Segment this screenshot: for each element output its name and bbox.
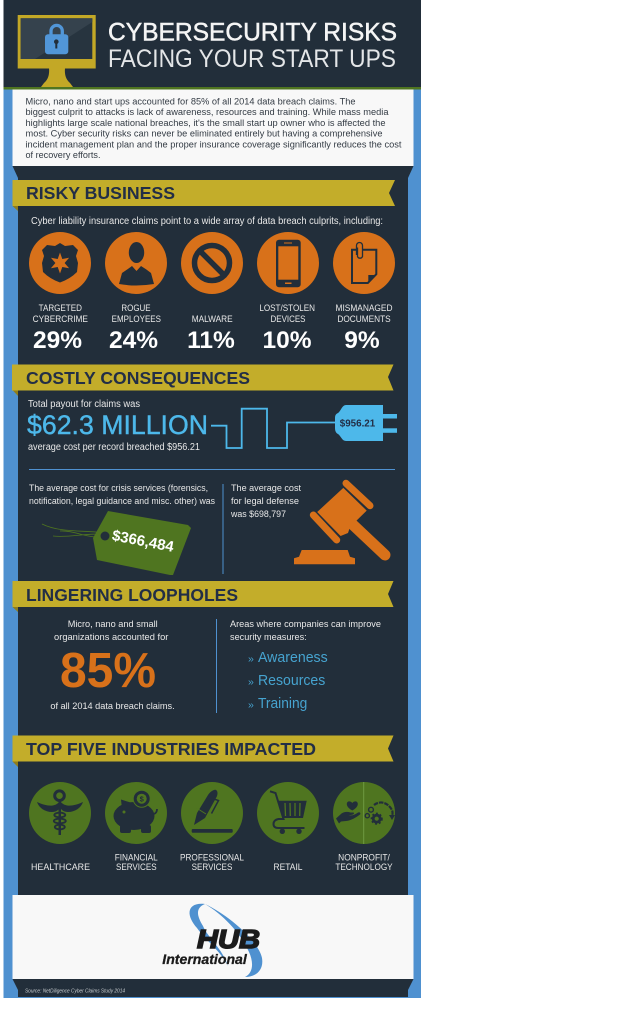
legal defense text: was $698,797 bbox=[230, 509, 286, 520]
intro line: Cyber liability insurance claims point to a wide array of data breach culprits, including: bbox=[31, 216, 383, 227]
icon: smartphone bbox=[257, 232, 319, 294]
industry labels: RETAIL bbox=[274, 862, 302, 872]
icon: documents with paperclip bbox=[333, 232, 395, 294]
icon: plug and cable: $956.21 bbox=[340, 418, 376, 430]
icon: police badge bbox=[29, 232, 91, 294]
stat: 85 percent: of all 2014 data breach claims. bbox=[50, 701, 175, 712]
panel: intro text: most. Cyber security risks can never be eliminated entirely but having a comprehensive bbox=[26, 129, 382, 140]
panel: intro text: incident management plan and the proper insurance coverage significantly reduces the cost bbox=[26, 139, 402, 150]
labels and percentages: 11% bbox=[187, 327, 235, 354]
icon: plug and cable bbox=[211, 405, 397, 448]
total payout: $62.3 MILLION bbox=[27, 410, 208, 440]
labels and percentages: DOCUMENTS bbox=[337, 314, 391, 324]
improvement areas list: Areas where companies can improve bbox=[230, 619, 381, 630]
legal defense text bbox=[230, 483, 301, 520]
labels and percentages: LOST/STOLEN bbox=[259, 303, 315, 313]
labels and percentages: EMPLOYEES bbox=[112, 314, 161, 324]
labels and percentages: ROGUE bbox=[121, 303, 151, 313]
panel: dark main bbox=[18, 160, 408, 997]
title bbox=[108, 18, 397, 73]
labels and percentages: MISMANAGED bbox=[336, 303, 393, 313]
section: top five industries bbox=[12, 736, 395, 872]
heading: lingering loopholes bbox=[12, 581, 394, 612]
improvement areas list: security measures: bbox=[230, 632, 307, 643]
improvement areas list: Training bbox=[258, 696, 307, 712]
heading: top five industries bbox=[12, 736, 394, 767]
source note: Source: NetDiligence Cyber Claims Study 2014 bbox=[25, 988, 125, 994]
logo: HUB International bbox=[162, 904, 262, 977]
industry labels: FINANCIAL bbox=[115, 852, 158, 862]
industry labels bbox=[31, 852, 393, 872]
icon: nonprofit and technology bbox=[333, 782, 395, 844]
panel: intro text: Micro, nano and start ups accounted for 85% of all 2014 data breach claims. The bbox=[26, 96, 356, 108]
crisis services text bbox=[29, 483, 215, 507]
industry labels: NONPROFIT/ bbox=[338, 852, 390, 862]
icon: gavel bbox=[294, 483, 385, 564]
labels and percentages: TARGETED bbox=[39, 303, 82, 313]
legal defense text: for legal defense bbox=[231, 496, 299, 507]
stat: 85 percent: Micro, nano and small bbox=[68, 619, 158, 630]
labels and percentages: CYBERCRIME bbox=[33, 314, 88, 324]
stat: 85 percent: 85% bbox=[60, 644, 156, 698]
icon: malware prohibition bbox=[181, 232, 243, 294]
heading: lingering loopholes: LINGERING LOOPHOLES bbox=[26, 585, 238, 605]
icon: monitor with padlock bbox=[18, 15, 96, 87]
labels and percentages: 24% bbox=[109, 327, 158, 354]
total payout bbox=[27, 399, 208, 453]
heading: costly consequences: COSTLY CONSEQUENCES bbox=[26, 368, 250, 388]
industry labels: SERVICES bbox=[116, 862, 157, 872]
panel: intro text bbox=[12, 90, 414, 166]
labels and percentages: 10% bbox=[262, 327, 312, 354]
logo: HUB International: HUB bbox=[197, 926, 260, 954]
improvement areas list: » bbox=[248, 699, 254, 711]
panel: intro text: highlights large scale national breaches, it's the small start up owner who is affected the bbox=[26, 118, 386, 129]
icon: pen signing bbox=[181, 782, 243, 844]
total payout: Total payout for claims was bbox=[28, 399, 140, 410]
heading: risky business bbox=[12, 180, 395, 211]
labels and percentages bbox=[33, 303, 393, 354]
icon: price tag: $366,484 bbox=[111, 527, 176, 556]
icon: shopping cart bbox=[257, 782, 319, 844]
title: CYBERSECURITY RISKS bbox=[108, 18, 397, 46]
heading: top five industries: TOP FIVE INDUSTRIES IMPACTED bbox=[26, 739, 316, 759]
icon: piggy bank: $ bbox=[140, 794, 145, 804]
section: risky business bbox=[12, 180, 395, 354]
improvement areas list: Awareness bbox=[258, 650, 328, 666]
logo: HUB International: International bbox=[162, 952, 247, 967]
labels and percentages: 29% bbox=[33, 327, 82, 354]
icon: rogue employee bbox=[105, 232, 167, 294]
panel: intro text: of recovery efforts. bbox=[26, 150, 100, 161]
crisis services text: notification, legal guidance and misc. other) was bbox=[29, 496, 215, 507]
panel: header bbox=[4, 0, 421, 90]
heading: costly consequences bbox=[12, 364, 394, 396]
panel: intro text: biggest culprit to attacks is lack of awareness, resources and training. While mass media bbox=[26, 107, 389, 118]
labels and percentages: 9% bbox=[344, 327, 380, 354]
panel: footer logo bbox=[12, 895, 414, 979]
improvement areas list: » bbox=[248, 676, 254, 688]
improvement areas list: » bbox=[248, 653, 254, 665]
labels and percentages: MALWARE bbox=[192, 314, 233, 324]
icon: price tag bbox=[42, 511, 191, 575]
labels and percentages: DEVICES bbox=[270, 314, 306, 324]
improvement areas list: Resources bbox=[258, 673, 325, 689]
section: lingering loopholes bbox=[12, 581, 394, 713]
legal defense text: The average cost bbox=[231, 483, 301, 494]
heading: risky business: RISKY BUSINESS bbox=[26, 183, 175, 203]
total payout: average cost per record breached $956.21 bbox=[28, 442, 200, 453]
crisis services text: The average cost for crisis services (forensics, bbox=[29, 483, 208, 494]
stat: 85 percent: organizations accounted for bbox=[54, 632, 168, 643]
title: FACING YOUR START UPS bbox=[108, 45, 396, 73]
icon: piggy bank bbox=[105, 782, 167, 844]
industry labels: PROFESSIONAL bbox=[180, 852, 244, 862]
icon: caduceus bbox=[29, 782, 91, 844]
industry labels: TECHNOLOGY bbox=[335, 862, 393, 872]
industry labels: HEALTHCARE bbox=[31, 862, 90, 872]
stat: 85 percent bbox=[50, 619, 175, 712]
improvement areas list bbox=[230, 619, 381, 712]
section: costly consequences bbox=[12, 364, 397, 575]
industry labels: SERVICES bbox=[192, 862, 232, 872]
